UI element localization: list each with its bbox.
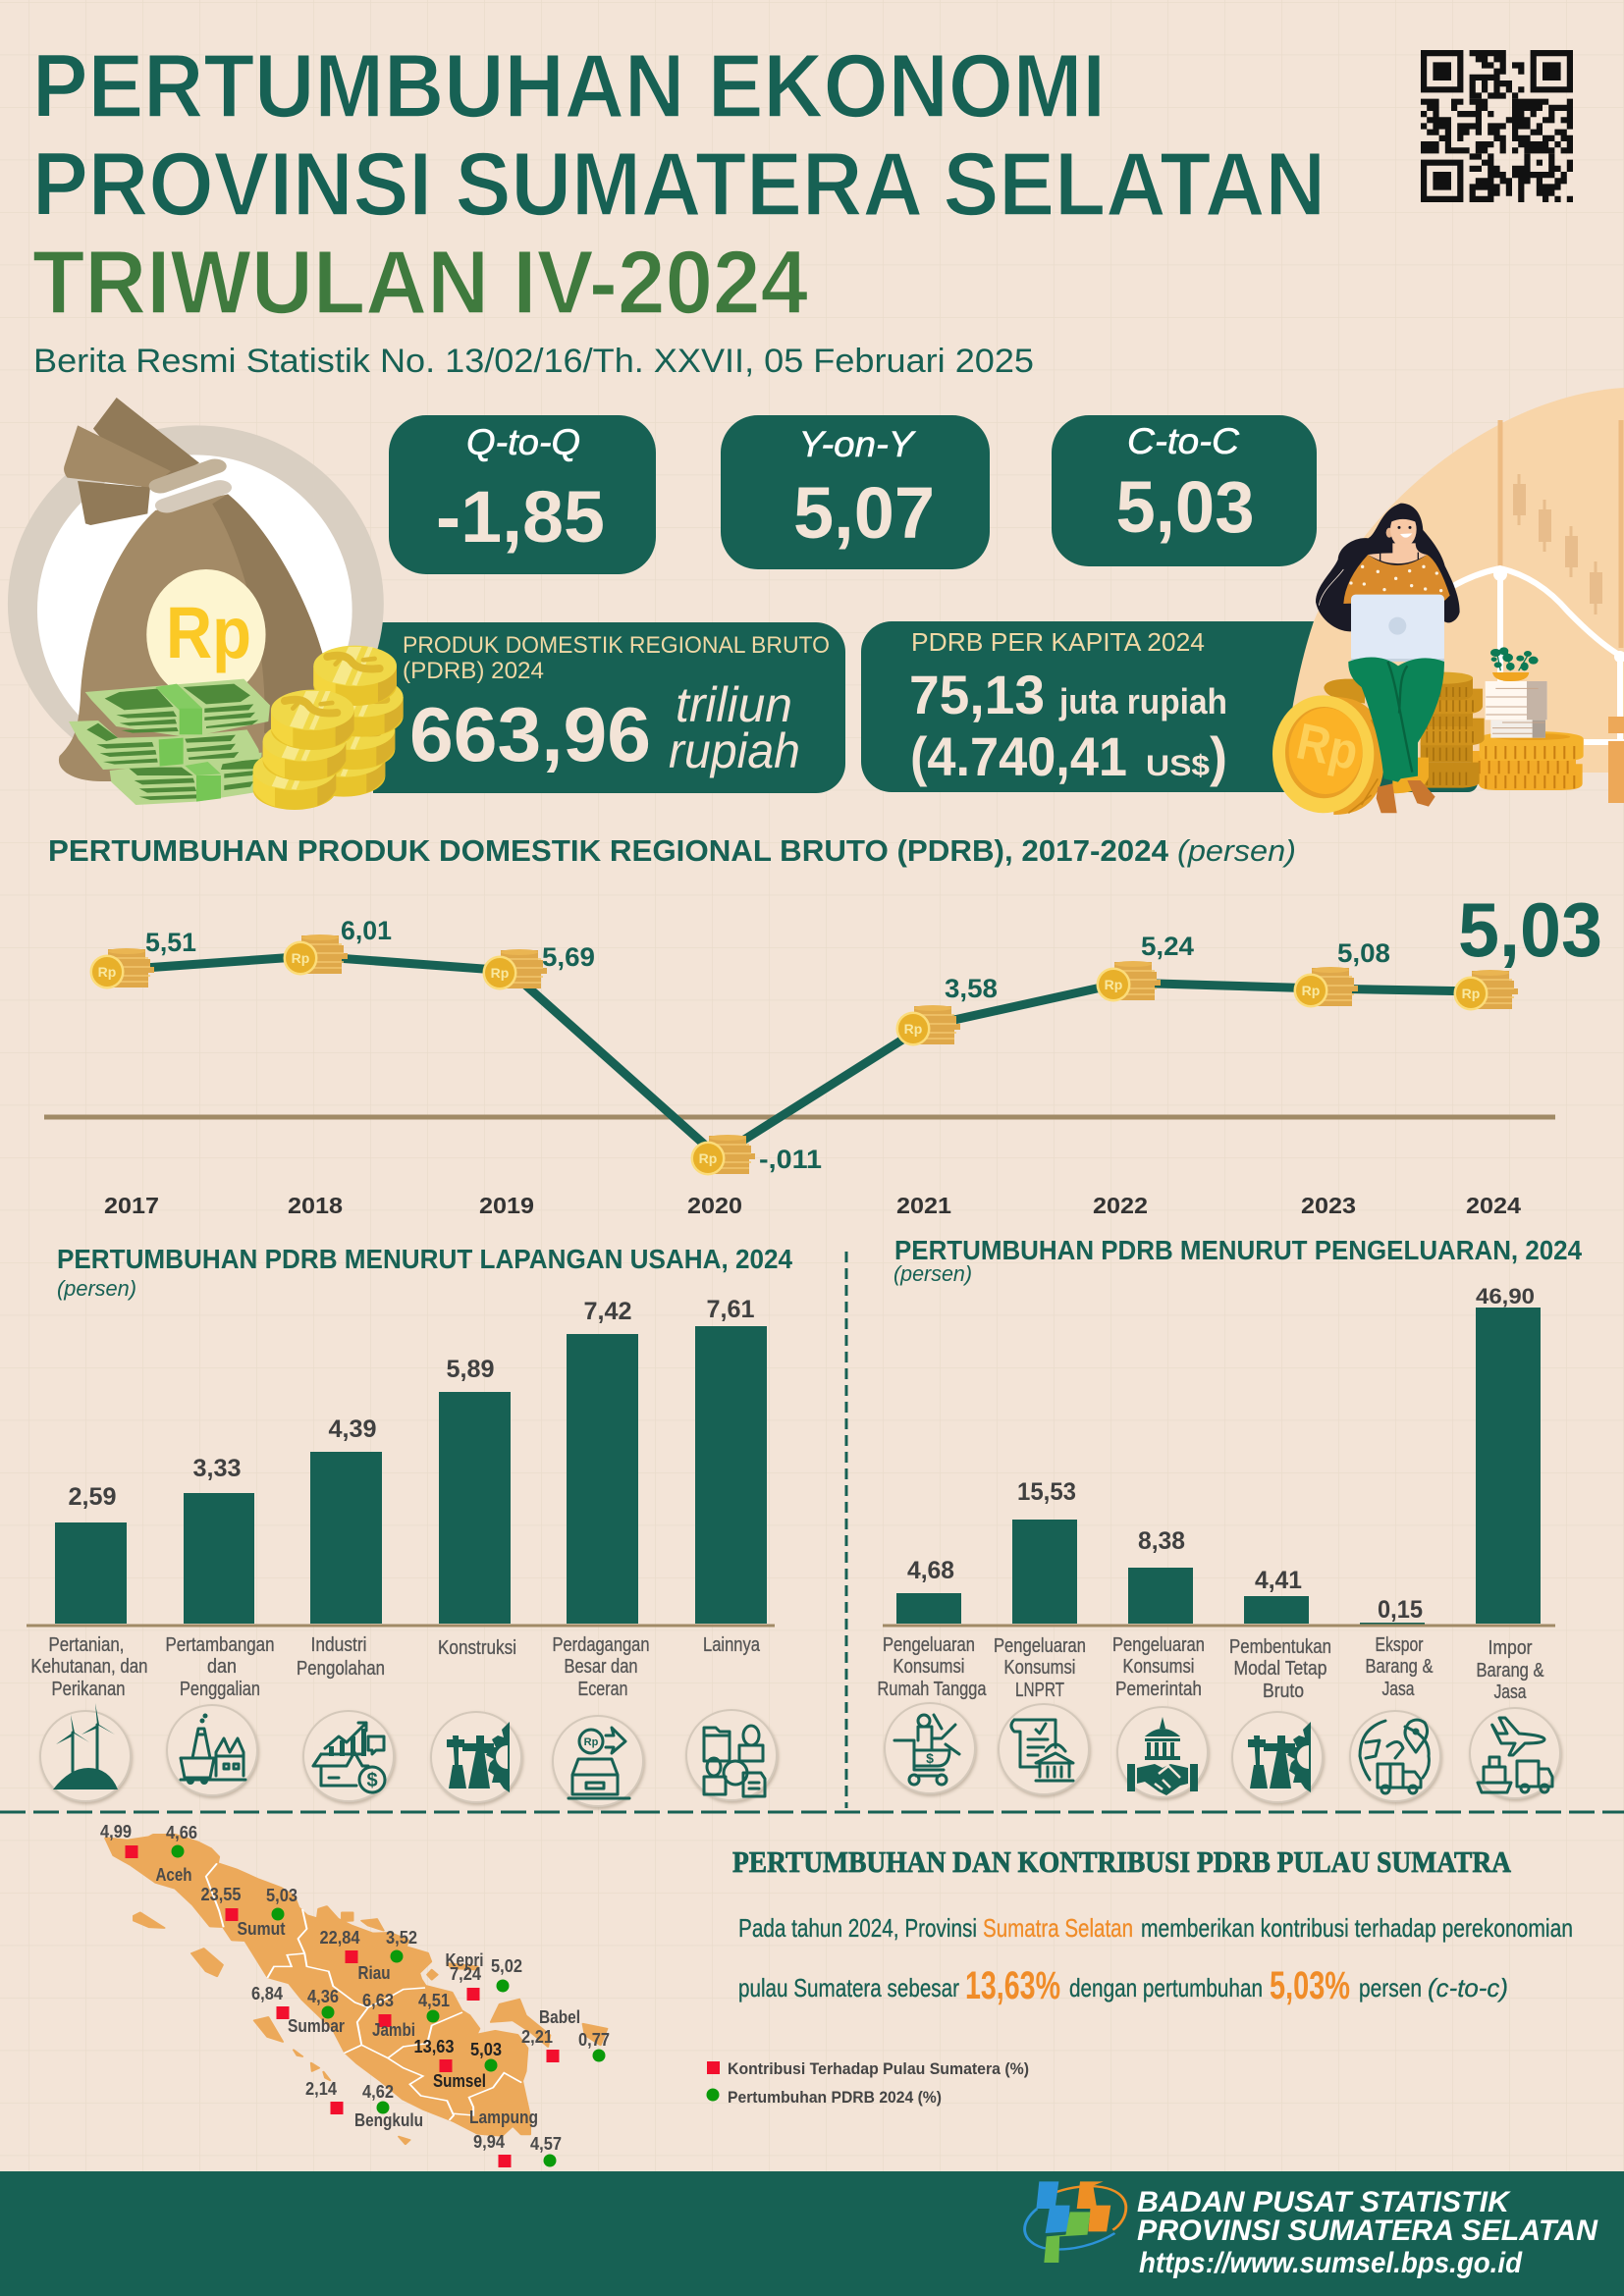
- bar chart: by industry: 2,59: [69, 1483, 116, 1511]
- heading: by industry: (persen): [57, 1276, 136, 1301]
- bar chart: by industry: Kehutanan, dan: [31, 1656, 147, 1678]
- bar chart: by expenditure: 4,41: [1255, 1567, 1302, 1594]
- heading: PDRB growth chart: (persen): [1177, 833, 1296, 868]
- panel: PDRB per kapita: PDRB PER KAPITA 2024: [911, 627, 1205, 657]
- map: Sumatra provinces: 5,03: [266, 1886, 298, 1905]
- bar chart: by expenditure: 4,68: [907, 1557, 954, 1584]
- heading: by expenditure: [893, 1235, 1582, 1286]
- map: Sumatra provinces: Jambi: [372, 2020, 415, 2040]
- icon: document with building: [999, 1704, 1089, 1794]
- panel: PDRB 2024: rupiah: [669, 723, 800, 778]
- map: Sumatra provinces: [100, 1822, 610, 2167]
- title: PERTUMBUHAN EKONOMI: [32, 36, 1106, 136]
- bar chart: by industry: Lainnya: [703, 1634, 761, 1656]
- illustration: woman with laptop on coins: [1272, 504, 1584, 815]
- map: Sumatra provinces: 6,84: [251, 1984, 283, 2003]
- footer text: BADAN PUSAT STATISTIK: [1137, 2186, 1511, 2218]
- bar chart: by expenditure: Konsumsi: [893, 1656, 964, 1678]
- bar chart: by industry: Pertanian,: [49, 1634, 124, 1656]
- icon: plane, ship and truck: [1470, 1708, 1560, 1798]
- icon: industry oil pump and gear: [1232, 1712, 1323, 1802]
- bar chart: by industry: Industri: [310, 1634, 367, 1656]
- panel: PDRB per kapita: juta rupiah: [1058, 681, 1227, 721]
- bar chart: by industry: Eceran: [577, 1679, 628, 1700]
- bar chart: by industry: Konstruksi: [438, 1637, 516, 1659]
- line chart: PDRB growth 2017-2024: 5,51: [145, 928, 196, 957]
- legend: Kontribusi Terhadap Pulau Sumatera (%): [728, 2059, 1029, 2078]
- text block: contribution summary: 13,63%: [965, 1964, 1060, 2007]
- line chart: PDRB growth 2017-2024: 2021: [896, 1193, 951, 1218]
- map: Sumatra provinces: Bengkulu: [354, 2110, 423, 2130]
- icon: industry oil pump and gear: [431, 1712, 521, 1802]
- panel: PDRB per kapita: (4.740,41: [910, 725, 1127, 787]
- statistic: C-to-C: 5,03: [1115, 466, 1255, 548]
- panel: PDRB per kapita: ): [1210, 725, 1227, 787]
- bar chart: by expenditure: Rumah Tangga: [878, 1679, 987, 1700]
- bar chart: by expenditure: Barang &: [1365, 1656, 1434, 1678]
- title: TRIWULAN IV-2024: [32, 233, 808, 333]
- line chart: PDRB growth 2017-2024: 2020: [687, 1193, 742, 1218]
- title: PROVINSI SUMATERA SELATAN: [32, 134, 1326, 235]
- map: Sumatra provinces: 4,99: [100, 1822, 132, 1842]
- panel: PDRB 2024: PRODUK DOMESTIK REGIONAL BRUTO: [403, 632, 830, 659]
- bar chart: by expenditure: Konsumsi: [1003, 1657, 1076, 1679]
- map: Sumatra provinces: Babel: [539, 2007, 580, 2027]
- line chart: PDRB growth 2017-2024: 6,01: [341, 916, 392, 945]
- map: Sumatra provinces: Sumsel: [433, 2071, 486, 2091]
- footer text: https://www.sumsel.bps.go.id: [1139, 2247, 1523, 2279]
- illustration: peach backdrop with candlestick chart: [861, 388, 1624, 803]
- bar chart: by expenditure: 15,53: [1017, 1478, 1076, 1506]
- bar chart: by expenditure: Ekspor: [1375, 1634, 1424, 1656]
- line chart: PDRB growth 2017-2024: 2022: [1093, 1193, 1148, 1218]
- icon: globe with truck and pin: [1350, 1711, 1440, 1801]
- statistic: Y-on-Y: Y-on-Y: [799, 424, 916, 464]
- icon: car with coin: Rp: [584, 1736, 599, 1748]
- map: Sumatra provinces: 3,52: [386, 1928, 417, 1948]
- bar chart: by industry: Pertambangan: [165, 1634, 275, 1656]
- heading: PDRB growth chart: PERTUMBUHAN PRODUK DOMESTIK REGIONAL BRUTO (PDRB), 2017-2024: [48, 833, 1169, 868]
- map: Sumatra provinces: 0,77: [578, 2030, 610, 2050]
- divider: vertical dashed: [844, 1252, 848, 1808]
- text block: contribution summary: 5,03%: [1270, 1964, 1350, 2007]
- icon: cash stacks and gold coins: [69, 646, 404, 810]
- line chart: PDRB growth 2017-2024: 2017: [104, 1193, 159, 1218]
- panel: PDRB per kapita: 75,13: [909, 664, 1045, 725]
- icon: money bag: [8, 398, 384, 782]
- heading: by industry: PERTUMBUHAN PDRB MENURUT LAPANGAN USAHA, 2024: [57, 1244, 792, 1274]
- text block: contribution summary: pulau Sumatera sebesar: [738, 1973, 959, 2002]
- bar chart: by industry: 7,61: [707, 1296, 755, 1323]
- map: Sumatra provinces: Kepri: [446, 1950, 483, 1970]
- text block: contribution summary: dengan pertumbuhan: [1069, 1973, 1263, 2002]
- map: Sumatra provinces: 5,03: [470, 2040, 502, 2059]
- map: Sumatra provinces: 22,84: [320, 1928, 359, 1948]
- divider: horizontal dashed: [0, 1810, 1624, 1814]
- bar chart: by industry: 3,33: [192, 1455, 242, 1482]
- panel: PDRB per kapita: US$: [1146, 750, 1210, 782]
- QR code: [1421, 53, 1573, 199]
- bar chart: by expenditure: LNPRT: [1015, 1680, 1064, 1701]
- panel: PDRB per kapita: [909, 627, 1227, 787]
- footer text: PROVINSI SUMATERA SELATAN: [1137, 2215, 1598, 2247]
- text block: contribution summary: Sumatra Selatan: [983, 1913, 1133, 1943]
- bar chart: by expenditure: Pembentukan: [1229, 1636, 1331, 1658]
- bar chart: by expenditure: Impor: [1489, 1637, 1533, 1659]
- line chart: PDRB growth 2017-2024: [44, 886, 1602, 1218]
- line chart: PDRB growth 2017-2024: 2023: [1301, 1193, 1356, 1218]
- icon: box with chart and dollar: $: [366, 1770, 378, 1791]
- icon: car with coin: [553, 1716, 643, 1806]
- bar chart: by expenditure: Modal Tetap: [1233, 1658, 1327, 1680]
- line chart: PDRB growth 2017-2024: Rp: [1462, 986, 1480, 1001]
- footer text: [1137, 2186, 1598, 2279]
- line chart: PDRB growth 2017-2024: 5,03: [1458, 886, 1602, 973]
- legend: [707, 2059, 1029, 2107]
- map: Sumatra provinces: 4,51: [418, 1991, 450, 2010]
- bar chart: by expenditure: Jasa: [1494, 1682, 1527, 1703]
- bar chart: by industry: dan: [207, 1656, 237, 1678]
- bar chart: by industry: Pengolahan: [297, 1658, 385, 1680]
- icon: mining factory: [167, 1705, 257, 1795]
- footer band: [0, 2171, 1624, 2296]
- map: Sumatra provinces: Riau: [357, 1963, 391, 1983]
- statistic: C-to-C: [1052, 415, 1317, 566]
- line chart: PDRB growth 2017-2024: Rp: [98, 964, 116, 980]
- bar chart: by industry: 5,89: [446, 1356, 495, 1383]
- bar chart: by industry: 4,39: [328, 1415, 377, 1443]
- icon: BPS logo: [1025, 2181, 1126, 2263]
- bar chart: by expenditure: 0,15: [1378, 1596, 1423, 1624]
- bar chart: by expenditure: [878, 1284, 1555, 1703]
- bar chart: by industry: Perdagangan: [552, 1634, 650, 1656]
- map: Sumatra provinces: 13,63: [414, 2037, 454, 2056]
- map: Sumatra provinces: 4,66: [166, 1823, 197, 1842]
- map: Sumatra provinces: Lampung: [469, 2108, 538, 2127]
- map: Sumatra provinces: Sumut: [238, 1919, 286, 1939]
- legend: Pertumbuhan PDRB 2024 (%): [728, 2088, 942, 2107]
- map: Sumatra provinces: 5,02: [491, 1956, 522, 1976]
- map: Sumatra provinces: Aceh: [155, 1865, 192, 1885]
- line chart: PDRB growth 2017-2024: Rp: [1105, 977, 1122, 992]
- bar chart: by expenditure: Bruto: [1263, 1681, 1304, 1702]
- line chart: PDRB growth 2017-2024: 5,08: [1337, 938, 1390, 968]
- bar chart: by expenditure: 8,38: [1138, 1527, 1185, 1555]
- bar chart: by expenditure: Jasa: [1382, 1679, 1415, 1700]
- icon: shopping cart: $: [926, 1750, 934, 1766]
- text block: contribution summary: persen: [1359, 1973, 1422, 2002]
- statistic: Y-on-Y: 5,07: [793, 472, 935, 554]
- statistic: Q-to-Q: [389, 415, 656, 574]
- line chart: PDRB growth 2017-2024: Rp: [491, 965, 509, 981]
- statistic: C-to-C: C-to-C: [1127, 421, 1239, 461]
- line chart: PDRB growth 2017-2024: Rp: [904, 1021, 922, 1037]
- bar chart: by industry: [27, 1296, 775, 1700]
- line chart: PDRB growth 2017-2024: -,011: [759, 1145, 822, 1174]
- statistic: Q-to-Q: Q-to-Q: [466, 422, 580, 462]
- map: Sumatra provinces: 4,62: [362, 2082, 394, 2102]
- coin Rp mark: Rp: [1292, 713, 1363, 781]
- text block: contribution summary: [738, 1913, 1573, 2007]
- bar chart: by expenditure: 46,90: [1476, 1284, 1535, 1308]
- bar chart: by expenditure: Konsumsi: [1123, 1656, 1194, 1678]
- bar chart: by expenditure: Pengeluaran: [883, 1634, 975, 1656]
- heading: by industry: [57, 1244, 792, 1301]
- line chart: PDRB growth 2017-2024: Rp: [1302, 983, 1320, 998]
- line chart: PDRB growth 2017-2024: 2019: [479, 1193, 534, 1218]
- line chart: PDRB growth 2017-2024: 2024: [1466, 1193, 1521, 1218]
- map: Sumatra provinces: 6,63: [362, 1991, 394, 2010]
- heading: by expenditure: (persen): [893, 1261, 972, 1286]
- icon: folders, people and documents: [686, 1710, 777, 1800]
- bar chart: by industry: 7,42: [583, 1298, 632, 1325]
- map: Sumatra provinces: 7,24: [450, 1964, 481, 1984]
- icon: wind turbines: [40, 1703, 131, 1801]
- bar chart: by industry: Penggalian: [180, 1679, 260, 1700]
- line chart: PDRB growth 2017-2024: Rp: [292, 950, 309, 966]
- bar chart: by expenditure: Barang &: [1477, 1660, 1544, 1682]
- title: [32, 36, 1326, 333]
- bag Rp mark: Rp: [166, 592, 251, 673]
- line chart: PDRB growth 2017-2024: 5,24: [1141, 932, 1194, 961]
- map: Sumatra provinces: 4,57: [530, 2134, 562, 2154]
- panel: PDRB 2024: [373, 622, 845, 793]
- map: Sumatra provinces: 2,21: [521, 2027, 553, 2047]
- bar chart: by expenditure: Pemerintah: [1115, 1679, 1202, 1700]
- line chart: PDRB growth 2017-2024: 2018: [288, 1193, 343, 1218]
- panel: PDRB 2024: triliun: [676, 677, 792, 732]
- heading: Sumatra contribution: PERTUMBUHAN DAN KONTRIBUSI PDRB PULAU SUMATRA: [732, 1844, 1512, 1879]
- icon: shopping cart: [885, 1703, 975, 1793]
- text block: contribution summary: (c-to-c): [1428, 1973, 1508, 2002]
- heading: by expenditure: PERTUMBUHAN PDRB MENURUT PENGELUARAN, 2024: [894, 1235, 1582, 1265]
- bar chart: by industry: Besar dan: [564, 1656, 638, 1678]
- icon: government handshake: [1117, 1707, 1208, 1797]
- line chart: PDRB growth 2017-2024: Rp: [699, 1150, 717, 1166]
- map: Sumatra provinces: 4,36: [307, 1987, 339, 2006]
- panel: PDRB 2024: 663,96: [409, 691, 651, 777]
- bar chart: by expenditure: Pengeluaran: [994, 1635, 1086, 1657]
- text block: contribution summary: Pada tahun 2024, Provinsi: [738, 1913, 977, 1943]
- statistic: Q-to-Q: -1,85: [436, 476, 605, 558]
- map: Sumatra provinces: 23,55: [200, 1885, 242, 1904]
- map: Sumatra provinces: Sumbar: [288, 2016, 345, 2036]
- subtitle: Berita Resmi Statistik No. 13/02/16/Th. XXVII, 05 Februari 2025: [33, 343, 1034, 380]
- line chart: PDRB growth 2017-2024: 5,69: [542, 942, 595, 972]
- icon: box with chart and dollar: [303, 1711, 394, 1801]
- line chart: PDRB growth 2017-2024: 3,58: [945, 974, 998, 1003]
- bar chart: by expenditure: Pengeluaran: [1112, 1634, 1205, 1656]
- map: Sumatra provinces: 2,14: [305, 2079, 337, 2099]
- statistic: Y-on-Y: [721, 415, 990, 569]
- panel: PDRB 2024: (PDRB) 2024: [403, 658, 544, 684]
- map: Sumatra provinces: 9,94: [473, 2132, 505, 2152]
- bar chart: by industry: Perikanan: [51, 1679, 126, 1700]
